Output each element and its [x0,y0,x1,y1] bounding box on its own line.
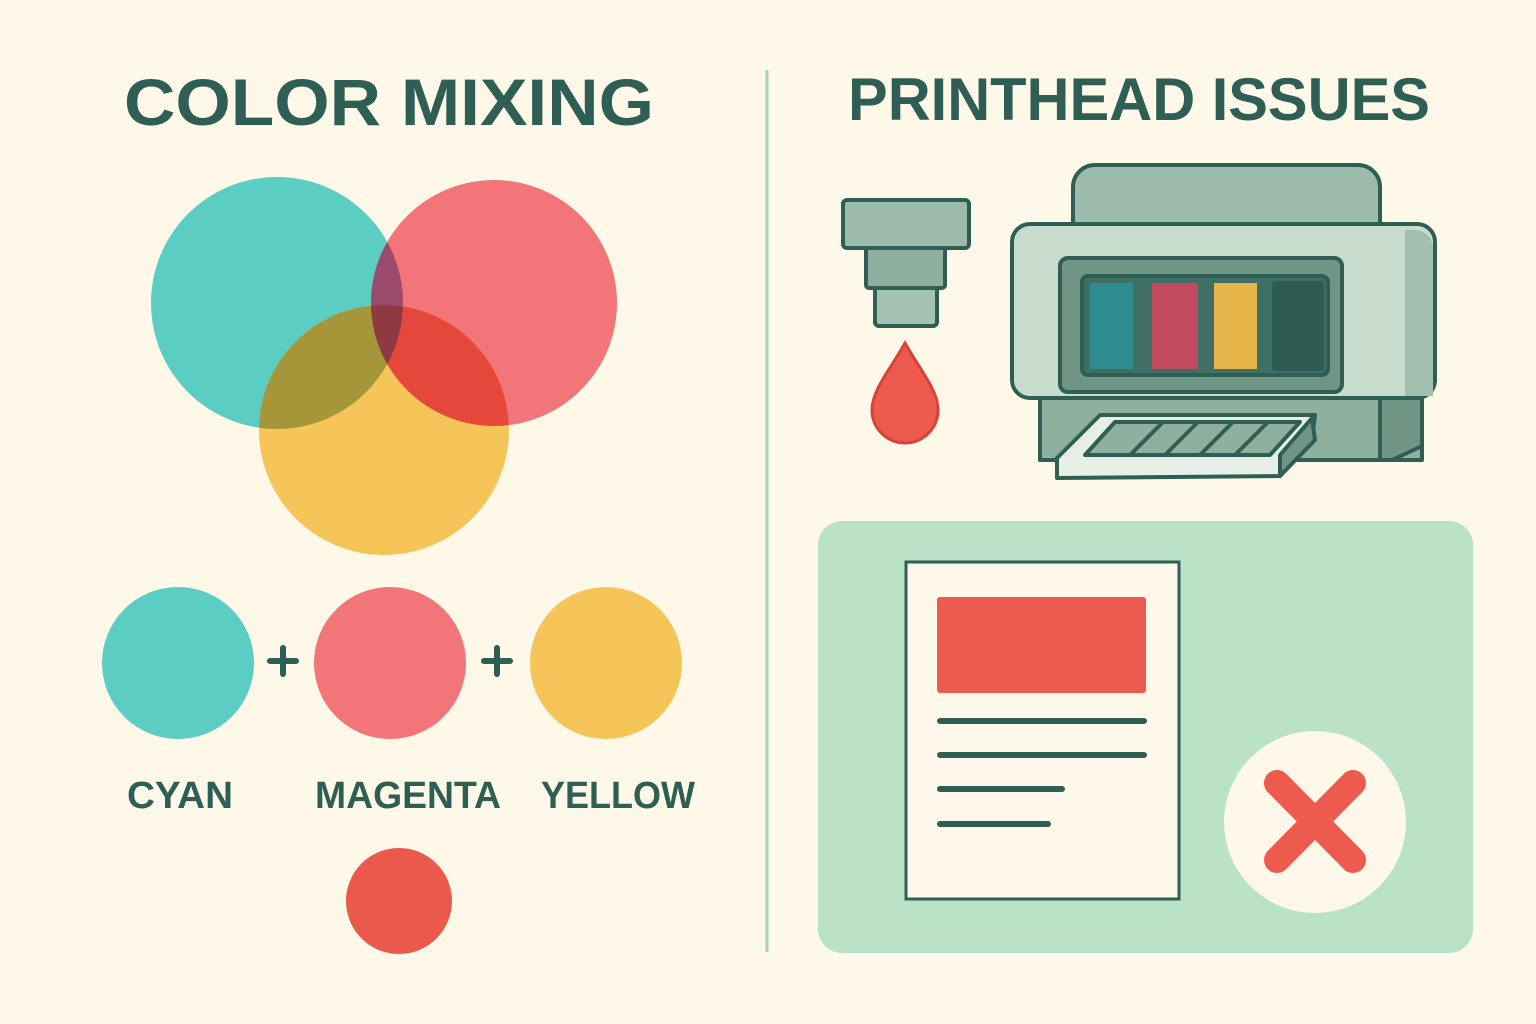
title: printhead issues: PRINTHEAD ISSUES [848,66,1430,133]
result circle [346,848,452,954]
primary circles [102,587,682,739]
title: color mixing: COLOR MIXING [124,65,654,139]
icon: printhead [843,200,969,326]
venn diagram [151,177,617,555]
labels: MAGENTA [315,775,501,817]
icon: printer [1012,165,1435,478]
labels [127,775,695,817]
labels: YELLOW [541,775,695,817]
icon: error x [1224,731,1406,913]
panel: bad print [818,521,1473,953]
labels: CYAN [127,775,233,817]
paper [906,562,1179,899]
icon: ink drop [872,343,938,443]
